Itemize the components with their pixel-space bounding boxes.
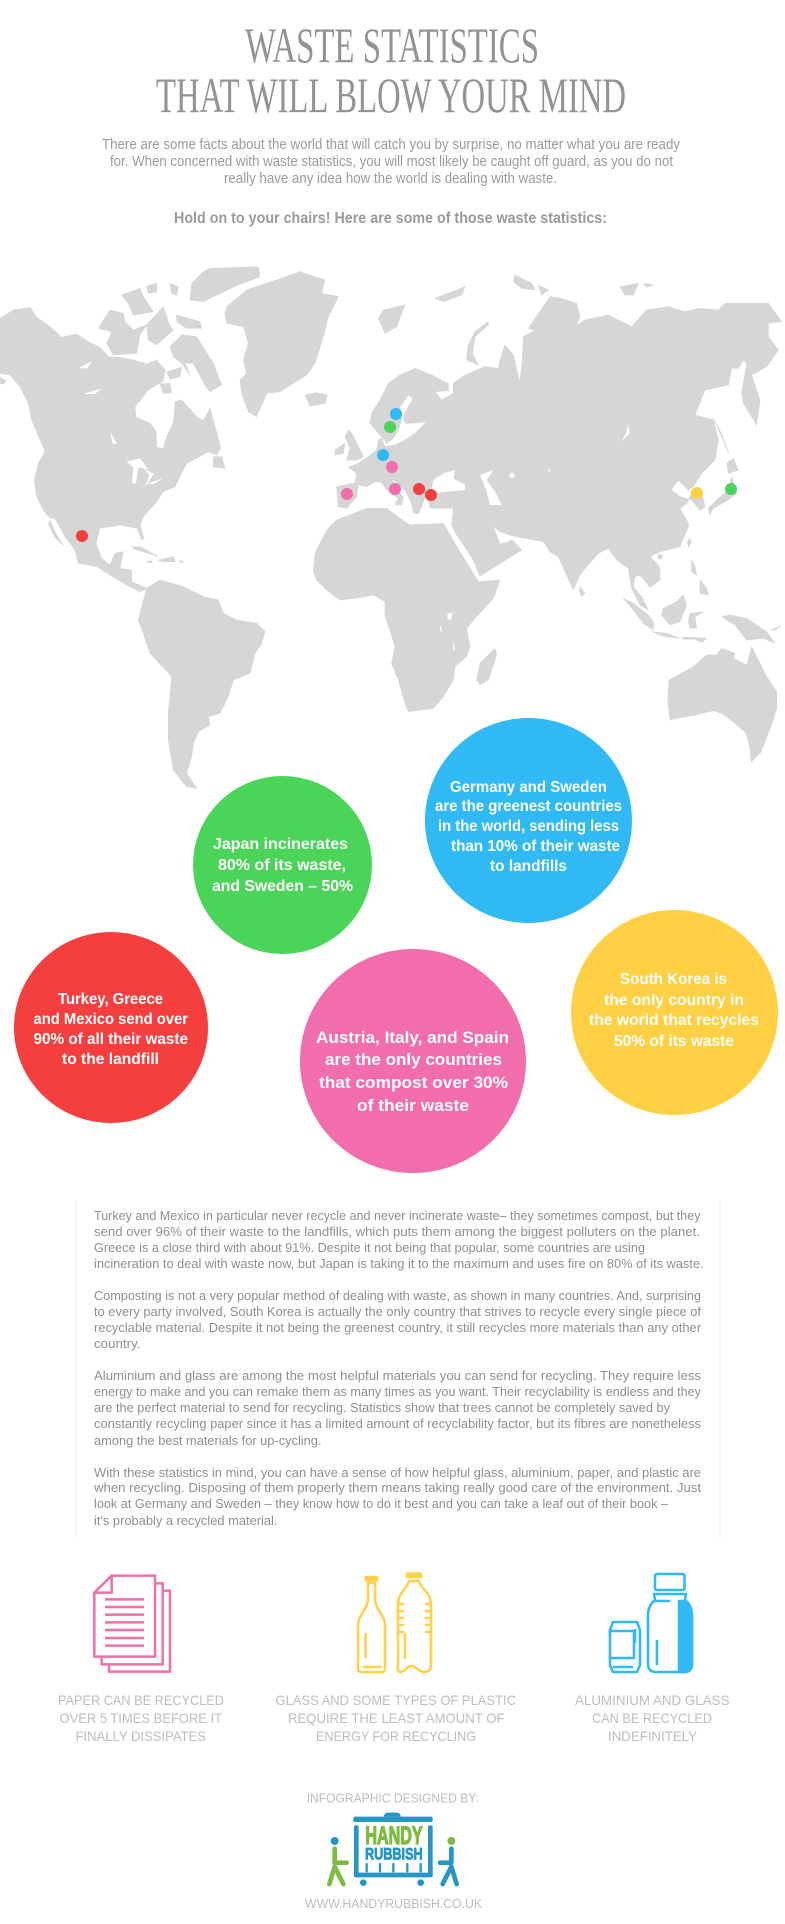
paragraph: Turkey and Mexico: send over 96% of their waste to the landfills, which puts them among the biggest polluters on the planet.	[94, 1225, 700, 1239]
caption: paper	[58, 1692, 224, 1744]
paragraph: aluminium and glass: Aluminium and glass are among the most helpful materials you can send for recycling. They require less	[94, 1369, 701, 1383]
paragraph: closing: look at Germany and Sweden – they know how to do it best and you can take a leaf out of their book –	[94, 1497, 668, 1511]
paragraph: composting	[94, 1289, 702, 1351]
lakes	[78, 361, 163, 486]
circle: Turkey, Greece and Mexico: 90% of all their waste	[34, 1031, 188, 1048]
paragraph: aluminium and glass: are the perfect material to send for recycling. Statistics show that trees cannot be completely saved by	[94, 1401, 671, 1415]
paragraph: composting: Composting is not a very popular method of dealing with waste, as shown in many countries. And, surprising	[94, 1289, 701, 1303]
circle: South Korea: the only country in	[604, 992, 744, 1009]
circle: Germany and Sweden landfills: in the world, sending less	[438, 818, 619, 835]
caption: paper: PAPER CAN BE RECYCLED	[58, 1692, 224, 1708]
paragraph: closing: when recycling. Disposing of them properly them means taking really good care of the environment. Just	[93, 1481, 702, 1495]
circle: Austria, Italy and Spain	[300, 949, 526, 1173]
caption: glass and plastic: REQUIRE THE LEAST AMOUNT OF	[288, 1710, 504, 1726]
designer credit: INFOGRAPHIC DESIGNED BY:	[307, 1792, 479, 1806]
caption: paper: OVER 5 TIMES BEFORE IT	[60, 1710, 222, 1726]
body text panel	[76, 1201, 720, 1537]
logo: Handy Rubbish: HANDY	[365, 1822, 423, 1850]
paragraph: closing	[93, 1466, 702, 1528]
map marker: Turkey	[425, 489, 437, 501]
circle: Germany and Sweden landfills: to landfills	[490, 858, 567, 875]
circle: Austria, Italy and Spain: are the only countries	[325, 1050, 502, 1069]
inland seas	[422, 423, 629, 508]
circle: Turkey, Greece and Mexico	[14, 932, 208, 1123]
circle: Japan and Sweden incineration: 80% of its waste,	[218, 857, 346, 874]
caption: aluminium and glass	[575, 1692, 730, 1744]
circle: Germany and Sweden landfills: Germany and Sweden	[450, 779, 607, 796]
logo: Handy Rubbish	[329, 1813, 457, 1886]
intro text: for. When concerned with waste statistics, you will most likely be caught off guard, as you do not	[110, 153, 674, 170]
map marker: Sweden blue	[390, 408, 402, 420]
caption: aluminium and glass: ALUMINIUM AND GLASS	[575, 1692, 730, 1708]
eurasia	[337, 275, 782, 610]
americas and greenland	[0, 267, 363, 592]
intro text: There are some facts about the world that will catch you by surprise, no matter what you are ready	[102, 136, 680, 153]
circle: Austria, Italy and Spain: Austria, Italy, and Spain	[316, 1028, 509, 1047]
map marker: South Korea	[691, 487, 703, 499]
paragraph: composting: country.	[94, 1337, 140, 1351]
paragraph: aluminium and glass: constantly recycling paper since it has a limited amount of recyclability factor, but its fibres are nonetheless	[94, 1417, 701, 1431]
caption: aluminium and glass: INDEFINITELY	[608, 1728, 698, 1744]
circle: Turkey, Greece and Mexico: to the landfill	[62, 1051, 159, 1068]
circle: Austria, Italy and Spain: of their waste	[357, 1096, 469, 1115]
paragraph: aluminium and glass: among the best materials for up-cycling.	[94, 1434, 322, 1448]
paragraph: Turkey and Mexico	[94, 1209, 704, 1271]
title	[156, 17, 626, 123]
circle: South Korea: South Korea is	[620, 971, 727, 988]
circle: Turkey, Greece and Mexico: Turkey, Greece	[58, 991, 163, 1008]
caption: glass and plastic: GLASS AND SOME TYPES OF PLASTIC	[276, 1692, 516, 1708]
circle: Japan and Sweden incineration: Japan incinerates	[213, 836, 348, 853]
logo: Handy Rubbish: RUBBISH	[365, 1844, 423, 1863]
paragraph: Turkey and Mexico: incineration to deal with waste now, but Japan is taking it to the maximum and uses fire on 80% of its waste.	[94, 1257, 704, 1271]
circle: South Korea: the world that recycles	[589, 1012, 759, 1029]
africa and south america	[132, 508, 500, 788]
intro text	[102, 136, 680, 187]
website url: WWW.HANDYRUBBISH.CO.UK	[305, 1897, 483, 1911]
icon: paper stack	[94, 1576, 170, 1672]
paragraph: closing: it's probably a recycled material.	[94, 1514, 278, 1528]
map marker: Greece	[413, 483, 425, 495]
lead-in heading: Hold on to your chairs! Here are some of those waste statistics:	[174, 210, 607, 227]
map marker: Germany	[377, 449, 389, 461]
circle: Japan and Sweden incineration: and Sweden – 50%	[212, 878, 353, 895]
circle: Japan and Sweden incineration	[193, 776, 372, 954]
paragraph: Turkey and Mexico: Turkey and Mexico in particular never recycle and never incinerate waste– they sometimes compost, but they	[94, 1209, 701, 1223]
circle: South Korea	[571, 910, 778, 1115]
paragraph: composting: to every party involved, South Korea is actually the only country that strives to recycle every single piece of	[94, 1305, 702, 1319]
title: WASTE STATISTICS	[245, 17, 539, 73]
asia-pacific islands and australia	[579, 538, 782, 762]
world map	[0, 267, 782, 788]
caption: aluminium and glass: CAN BE RECYCLED	[592, 1710, 712, 1726]
map marker: Mexico	[76, 530, 88, 542]
paragraph: closing: With these statistics in mind, you can have a sense of how helpful glass, aluminium, paper, and plastic are	[94, 1466, 701, 1480]
intro text: really have any idea how the world is dealing with waste.	[224, 170, 557, 187]
circle: South Korea: 50% of its waste	[614, 1033, 734, 1050]
circle: Germany and Sweden landfills: than 10% of their waste	[451, 838, 620, 855]
circle: Germany and Sweden landfills	[425, 718, 632, 923]
paragraph: aluminium and glass	[94, 1369, 702, 1448]
map marker: Austria	[386, 461, 398, 473]
circle: Germany and Sweden landfills: are the greenest countries	[435, 798, 622, 815]
icon: glass and plastic bottles	[358, 1574, 431, 1672]
paragraph: aluminium and glass: energy to make and you can remake them as many times as you want. Their recyclability is endless and they	[94, 1385, 702, 1399]
icon: can and bottle	[610, 1574, 692, 1672]
caption: glass and plastic: ENERGY FOR RECYCLING	[316, 1728, 476, 1744]
paragraph: Turkey and Mexico: Greece is a close third with about 91%. Despite it not being that popular, some countries are using	[94, 1241, 645, 1255]
map marker: Sweden green	[384, 421, 396, 433]
caption: glass and plastic	[276, 1692, 516, 1744]
paragraph: composting: recyclable material. Despite it not being the greenest country, it still recycles more materials than any other	[94, 1321, 701, 1335]
map marker: Spain	[341, 488, 353, 500]
map marker: Italy	[389, 483, 401, 495]
circle: Austria, Italy and Spain: that compost over 30%	[319, 1073, 508, 1092]
map marker: Japan	[725, 483, 737, 495]
circle: Turkey, Greece and Mexico: and Mexico send over	[34, 1011, 188, 1028]
caption: paper: FINALLY DISSIPATES	[76, 1728, 206, 1744]
